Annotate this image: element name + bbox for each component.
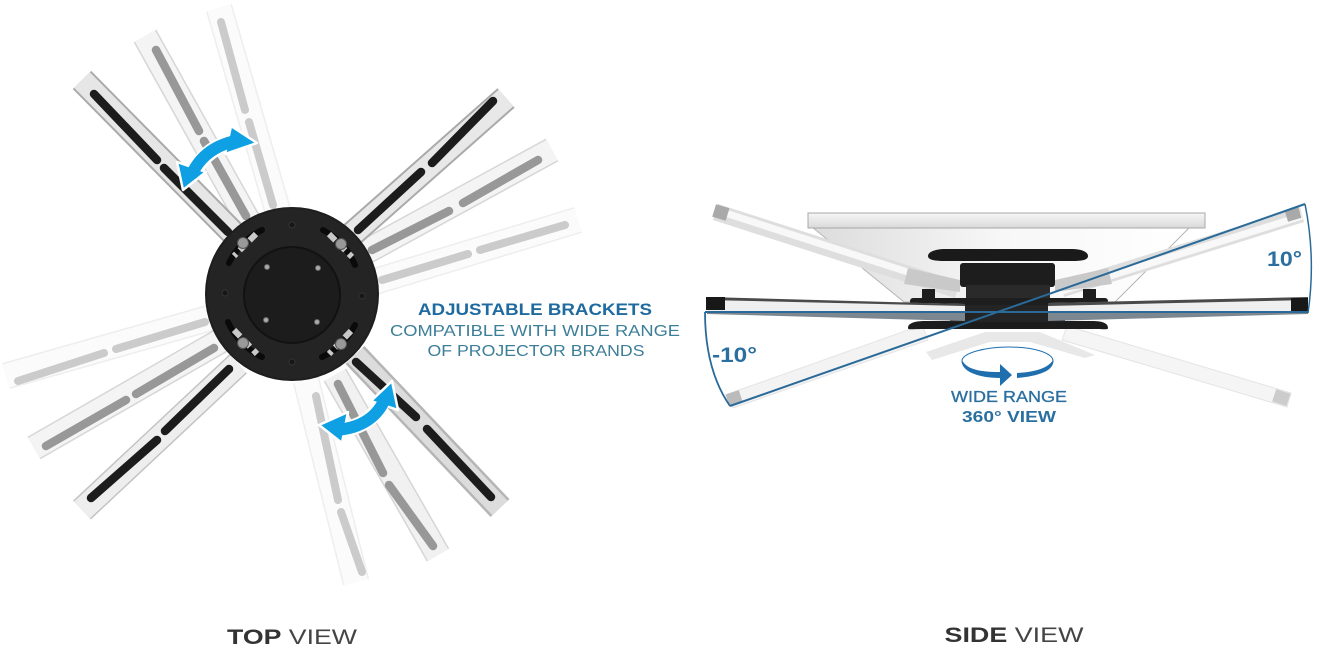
callout: adjustable brackets: ADJUSTABLE BRACKETS — [418, 300, 652, 319]
bracket: lower right, middle — [335, 375, 438, 555]
bracket: upper left, middle — [145, 36, 270, 260]
bracket: upper left, faded — [219, 8, 292, 260]
callout: adjustable brackets — [390, 300, 680, 360]
faded mount parts — [926, 332, 1095, 360]
bracket: upper left, dark — [82, 80, 240, 240]
panel: top view — [6, 8, 680, 649]
label: wide range 360 view: 360° VIEW — [962, 409, 1057, 426]
bracket: upper right, faded — [370, 220, 578, 283]
panel: side view — [705, 204, 1311, 647]
horizontal bar: left — [706, 297, 965, 321]
heading: side view: SIDE VIEW — [944, 624, 1084, 647]
callout: adjustable brackets: COMPATIBLE WITH WIDE RANGE — [390, 323, 680, 340]
arrow: lower rotation — [319, 381, 398, 443]
label: wide range 360 view: WIDE RANGE — [951, 389, 1067, 406]
bar end caps — [712, 204, 1301, 406]
bracket: lower left, dark — [82, 364, 238, 510]
label: wide range 360 view — [951, 389, 1067, 426]
bracket: upper right, middle — [360, 150, 552, 255]
label: minus ten degrees: -10° — [712, 344, 757, 367]
heading: top view: TOP VIEW — [227, 626, 357, 649]
faded bar: lower right — [1062, 326, 1291, 407]
raised bar: upper left — [713, 204, 960, 298]
bracket: upper right, dark — [350, 98, 506, 236]
icon: 360 rotation arrow — [962, 347, 1053, 386]
mount body — [904, 249, 1112, 329]
round black hub — [205, 207, 379, 381]
arrow: upper rotation — [177, 126, 257, 190]
tilt range lines — [705, 204, 1311, 406]
raised bar: upper right — [1060, 207, 1304, 297]
bracket: lower left, middle — [34, 340, 222, 448]
bracket: lower left, faded — [6, 318, 210, 381]
label: ten degrees: 10° — [1267, 248, 1302, 271]
callout: adjustable brackets: OF PROJECTOR BRANDS — [428, 343, 644, 360]
bracket: lower right, faded — [306, 380, 362, 582]
ceiling plate — [808, 213, 1205, 302]
horizontal bar: right — [1048, 297, 1308, 321]
faded bar: lower left — [728, 325, 928, 408]
bracket: lower right, dark — [355, 355, 500, 508]
